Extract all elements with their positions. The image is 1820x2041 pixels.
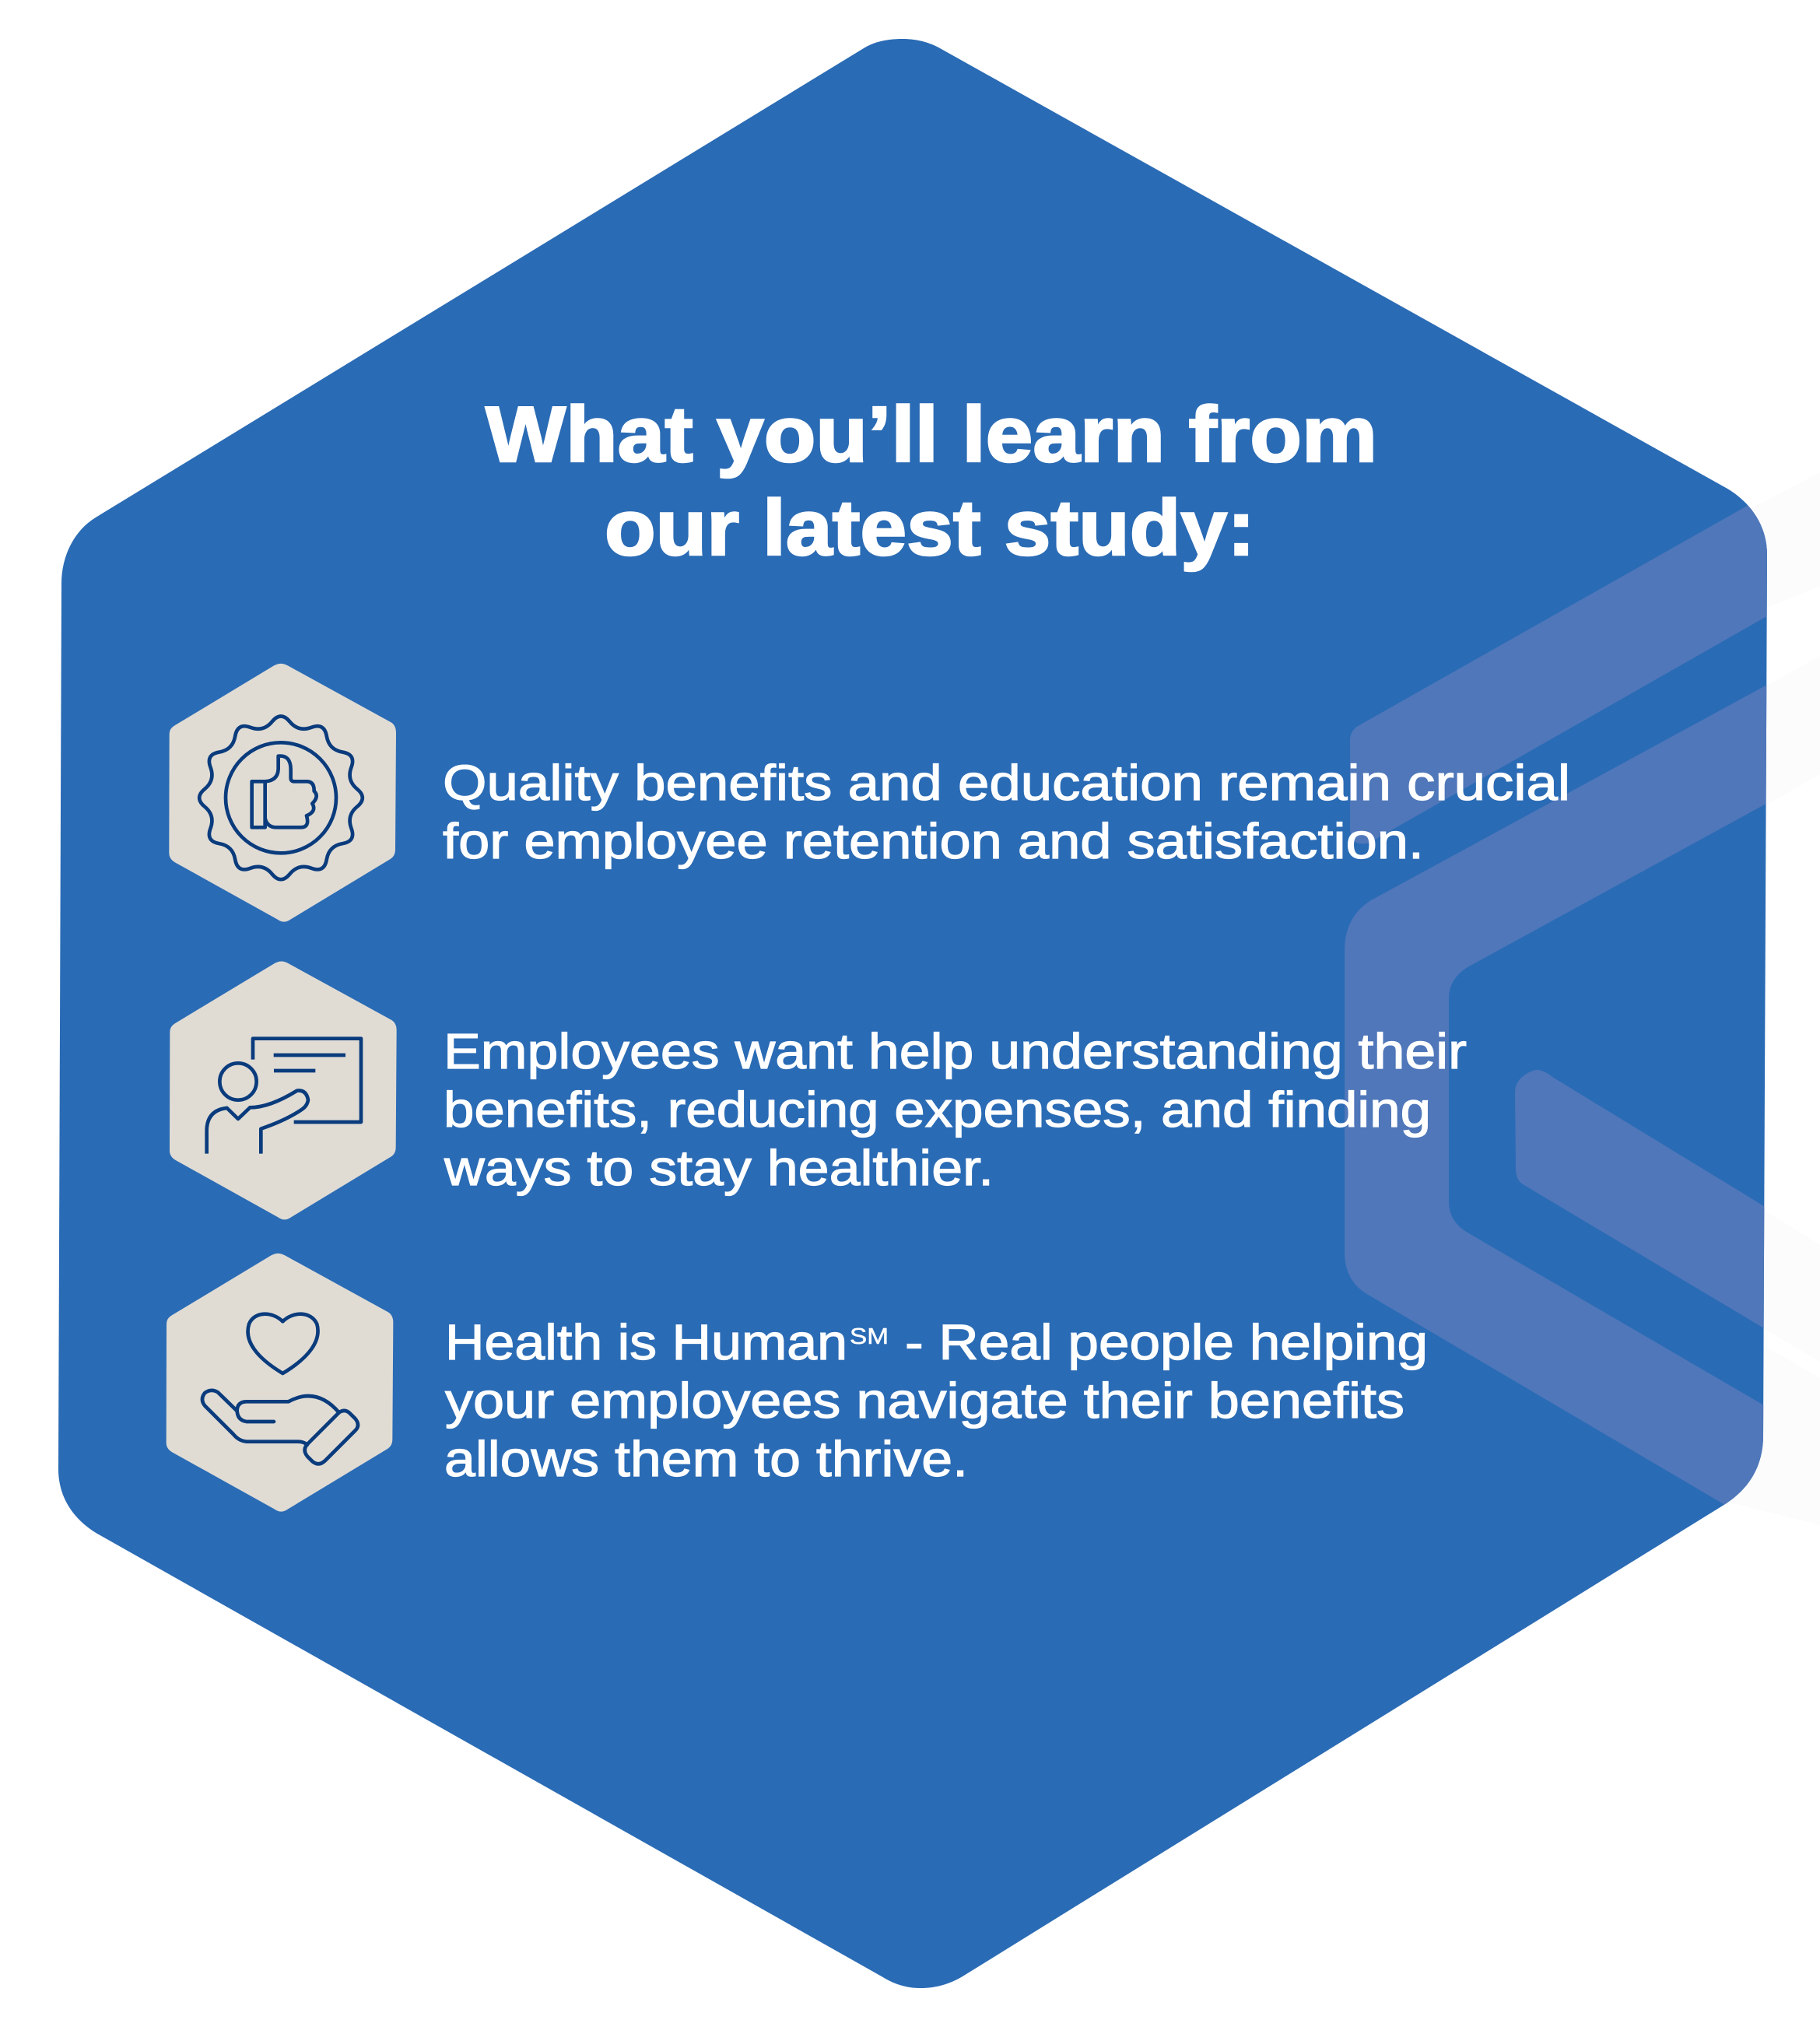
text: health is human (444, 1314, 1428, 1487)
text: employees want help: benefits, reducing expenses, and finding (444, 1082, 1431, 1138)
text: quality benefits: for employee retention and satisfaction. (443, 813, 1424, 869)
text: health is human: SM (850, 1324, 889, 1349)
watermark logo inside hexagon (1345, 506, 1767, 1505)
text: health is human: your employees navigate their benefits (445, 1373, 1404, 1429)
title: What you’ll learn from (486, 391, 1377, 479)
text: health is human: Health is Human (445, 1314, 847, 1370)
icon: thumbs-up badge (169, 664, 396, 922)
text: health is human: allows them to thrive. (444, 1431, 968, 1487)
text: employees want help: Employees want help understanding their (444, 1023, 1467, 1079)
icon: heart over hand (167, 1254, 393, 1512)
text: health is human: - Real people helping (905, 1314, 1428, 1370)
icon: presenter at board (170, 961, 397, 1219)
title (486, 391, 1377, 572)
faint background watermark (1712, 472, 1820, 1525)
title: our latest study: (605, 485, 1255, 572)
text: employees want help (444, 1023, 1467, 1196)
text: quality benefits (443, 755, 1570, 869)
text: employees want help: ways to stay healthier. (444, 1140, 994, 1196)
text: quality benefits: Quality benefits and education remain crucial (443, 755, 1570, 811)
